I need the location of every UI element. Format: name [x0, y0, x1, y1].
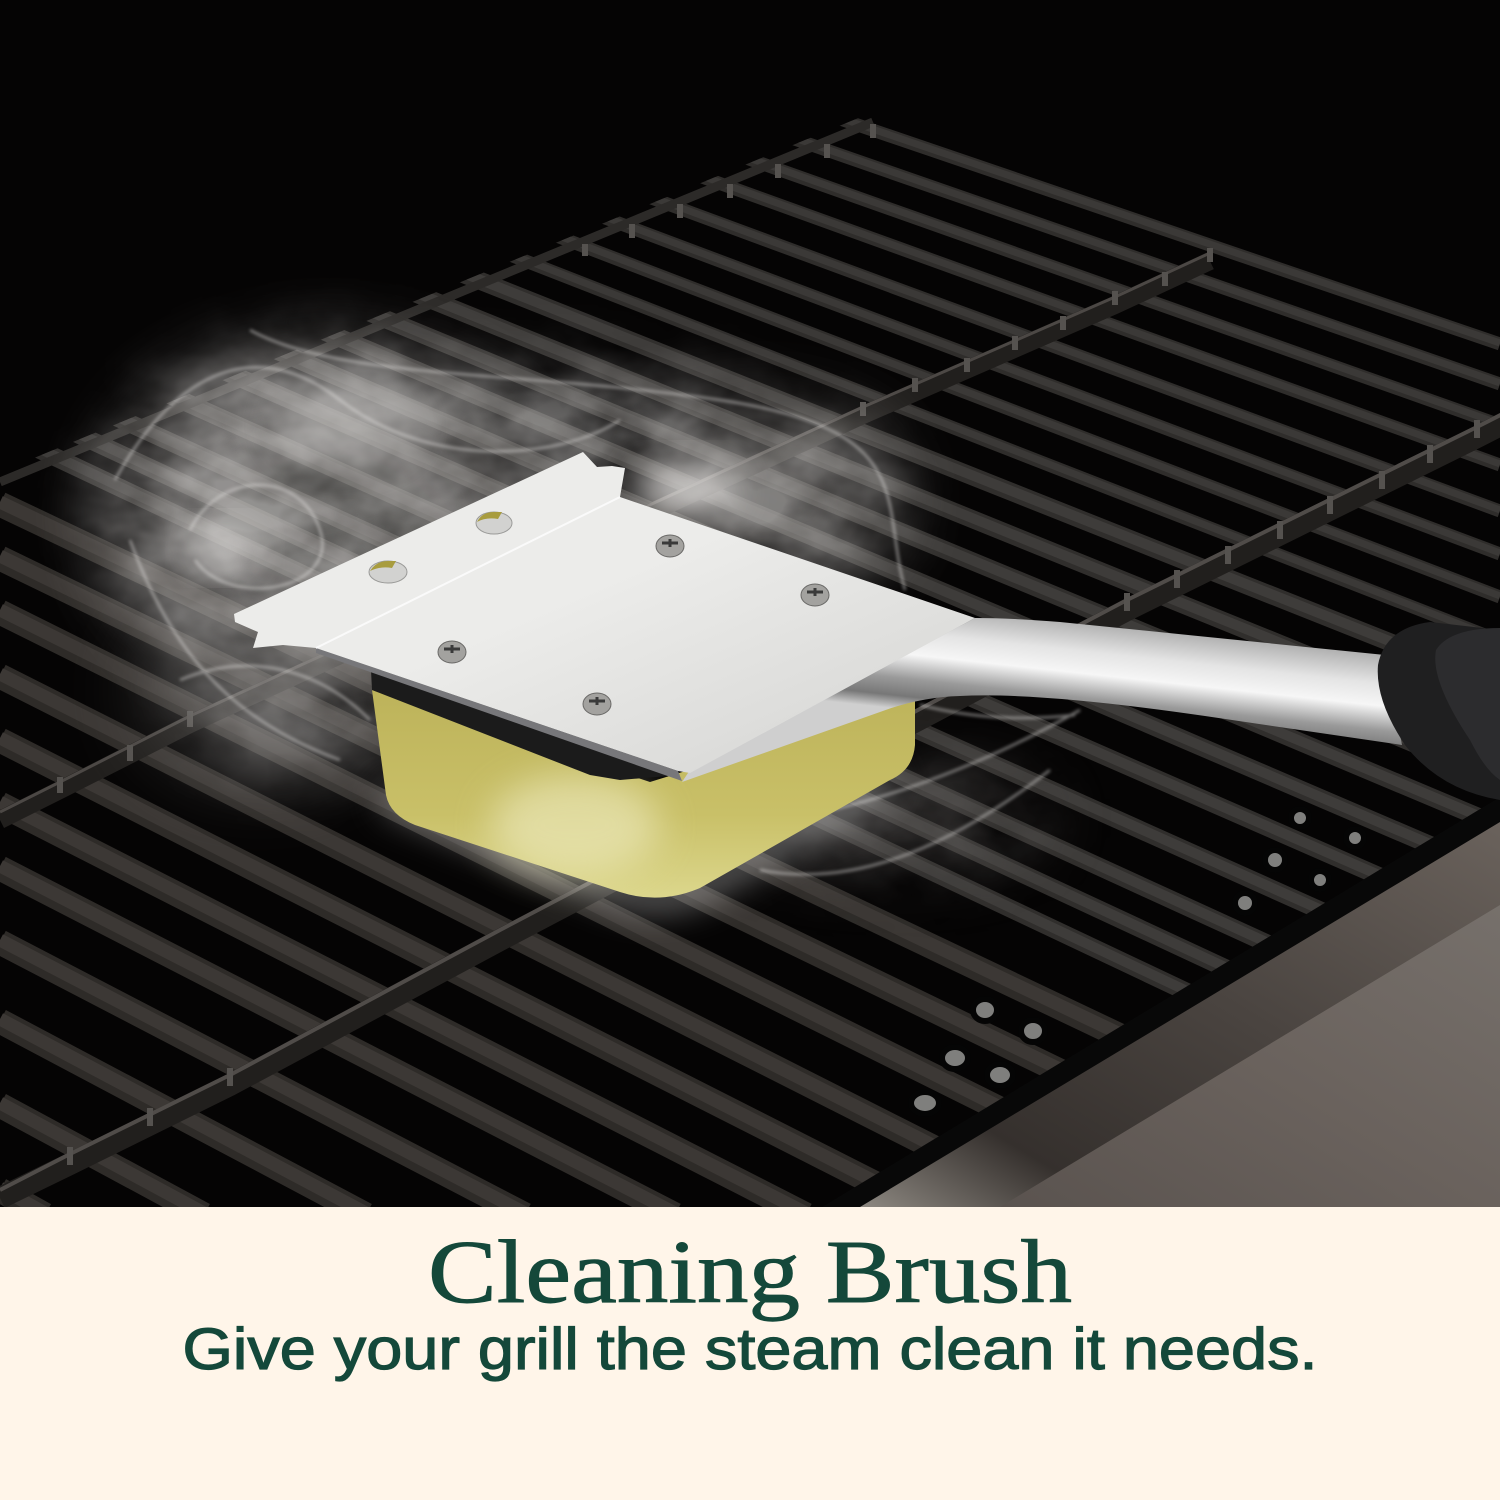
- steam cloud: [100, 330, 1080, 874]
- grate junction highlights: [60, 124, 1477, 1165]
- brush: sponge: [372, 690, 915, 898]
- burner tubes: [911, 809, 1364, 1114]
- cleaning brush: [234, 452, 1500, 898]
- steam wisps: [115, 330, 1080, 874]
- brush: grip texture panel: [1435, 628, 1500, 780]
- brush: plate front edge: [316, 648, 682, 781]
- brush: rubber grip: [1378, 622, 1500, 800]
- icon: mounting holes: [369, 512, 512, 583]
- brush: scraper fold line: [316, 497, 620, 648]
- brush: black pad: [371, 670, 680, 780]
- icon: screws: [438, 535, 829, 715]
- brush: sponge glow: [386, 780, 890, 898]
- title: Cleaning Brush: [428, 1223, 1072, 1322]
- stainless grill tray: [822, 797, 1500, 1207]
- grate bars: [0, 118, 1500, 1207]
- steam texture: [100, 340, 1050, 870]
- subtitle: Give your grill the steam clean it needs.: [182, 1317, 1318, 1382]
- brush: steel plate: [234, 452, 975, 773]
- grate cross members: [0, 122, 1500, 1198]
- brush: handle: [682, 618, 1402, 782]
- grill grate: [0, 118, 1500, 1207]
